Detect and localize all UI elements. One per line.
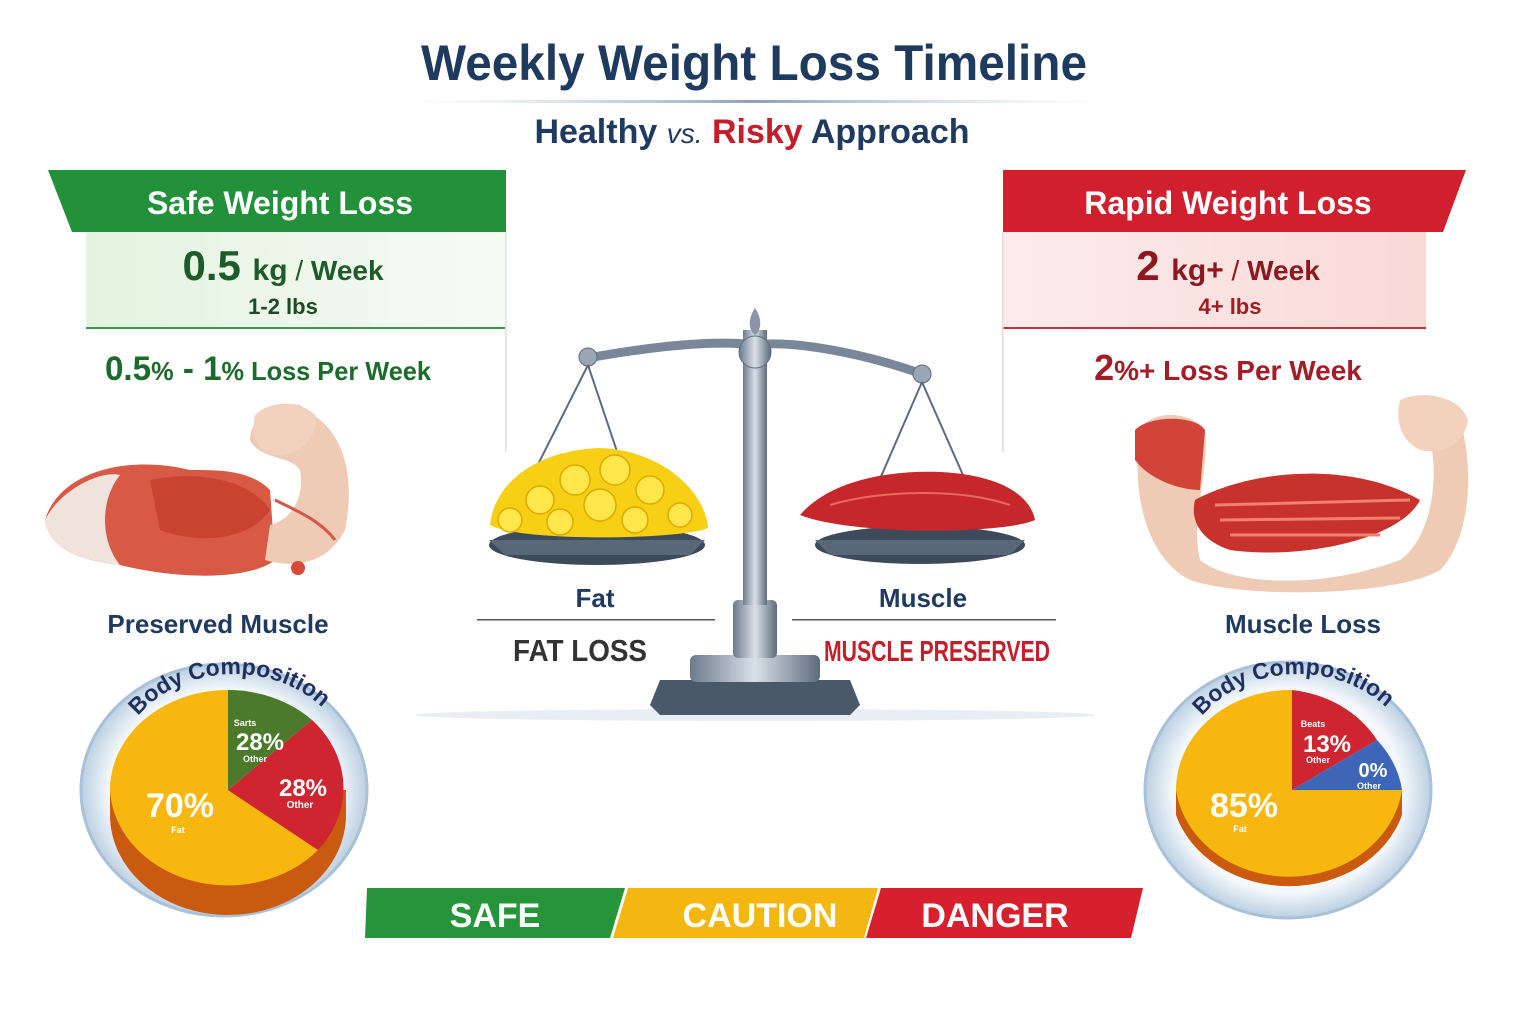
risk bar: CAUTION [683,897,837,935]
chart: body composition safe [80,662,368,918]
chart: body composition rapid: Beats [1301,719,1325,729]
rate box: safe: 1-2 lbs [248,294,318,319]
chart: body composition safe: Body Composition [128,662,328,715]
label: fat loss: FAT LOSS [513,633,647,668]
icon: balance scale [415,308,1095,721]
chart: body composition safe: 28% [236,729,284,756]
chart: body composition rapid: 85% [1210,787,1278,825]
chart: body composition rapid [1144,660,1432,920]
rate box: safe [86,232,506,329]
chart: body composition safe: Other [243,754,267,764]
icon: muscle loss arm [1135,395,1468,592]
icon: preserved muscle arm [45,404,349,576]
label: muscle preserved [792,583,1056,668]
banner: safe [48,170,506,232]
panel: safe weight loss [48,170,506,452]
label: muscle loss: Muscle Loss [1225,609,1381,639]
icon: fat pan [489,448,708,565]
chart: body composition safe: Sarts [234,718,256,728]
chart: body composition rapid: Other [1306,755,1330,765]
subtitle: Healthy vs. Risky Approach [534,113,970,151]
panel: rapid weight loss [1002,170,1466,452]
risk bar [365,888,1143,938]
banner: safe: Safe Weight Loss [147,185,413,221]
chart: body composition safe: 70% [146,787,214,825]
title: Weekly Weight Loss Timeline [421,35,1087,91]
chart: body composition safe: Fat [171,825,185,835]
label: preserved muscle: Preserved Muscle [107,609,329,639]
risk bar: DANGER [921,897,1069,935]
label: muscle preserved: MUSCLE PRESERVED [824,636,1050,668]
rate box: rapid [1003,232,1426,329]
percent text: rapid: 2%+ Loss Per Week [1094,347,1362,388]
chart: body composition safe: 28% [279,775,327,802]
rate box: rapid: 2 kg+ / Week [1136,242,1320,289]
chart: body composition rapid: 0% [1359,760,1388,782]
chart: body composition rapid: 13% [1303,731,1351,758]
banner: rapid: Rapid Weight Loss [1084,185,1372,221]
icon: muscle pan [800,472,1035,564]
chart: body composition rapid: Fat [1233,824,1247,834]
chart: body composition rapid: Body Composition [1192,662,1392,715]
label: fat loss: Fat [576,583,615,613]
rate box: rapid: 4+ lbs [1199,294,1261,319]
banner: rapid [1003,170,1466,232]
chart: body composition safe: Other [287,800,313,811]
risk bar: SAFE [450,897,540,935]
rate box: safe: 0.5 kg / Week [182,242,384,289]
percent text: safe: 0.5% - 1% Loss Per Week [105,350,432,388]
label: muscle preserved: Muscle [879,583,967,613]
chart: body composition rapid: Other [1357,781,1381,791]
label: fat loss [477,583,715,668]
